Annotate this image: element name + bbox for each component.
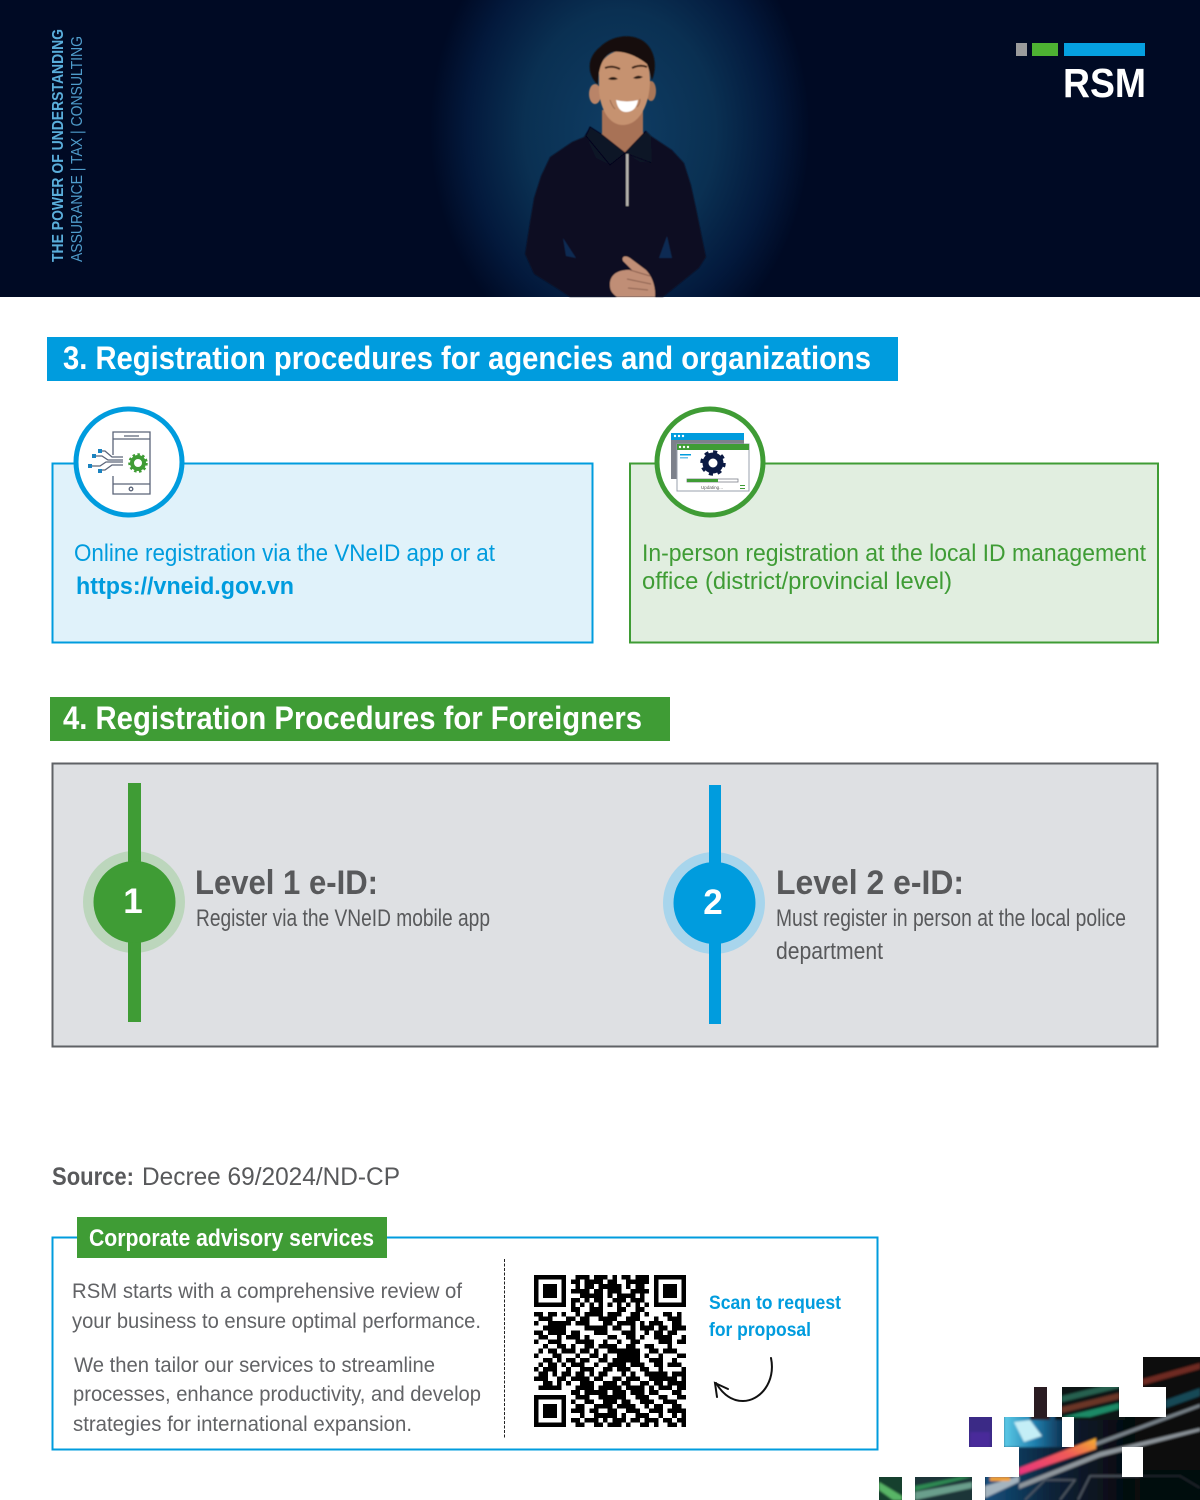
level 2 timeline marker: 2 — [703, 883, 723, 922]
heading: section 4: 4. Registration Procedures for Foreigners — [63, 700, 642, 736]
QR code — [534, 1275, 686, 1427]
level 1 text — [195, 864, 490, 932]
panel label — [77, 1217, 387, 1258]
description text: strategies for international expansion. — [73, 1413, 412, 1436]
mosaic white cut-outs — [1062, 1417, 1143, 1477]
text: in-person registration: In-person registration at the local ID management — [642, 540, 1146, 567]
description text: We then tailor our services to streamline — [74, 1354, 435, 1377]
level 2 text: Must register in person at the local police — [776, 905, 1126, 932]
icon: browser windows with gear: Updating... — [701, 485, 723, 490]
description text: RSM starts with a comprehensive review of — [72, 1280, 462, 1303]
call to action: for proposal — [709, 1320, 811, 1341]
text: in-person registration — [642, 540, 1146, 595]
call to action — [709, 1293, 842, 1341]
call to action: Scan to request — [709, 1293, 842, 1314]
arrow: curved pointing to QR — [715, 1358, 772, 1401]
header banner — [0, 0, 1200, 297]
photo: smiling man in dark sweater — [525, 36, 706, 297]
RSM logo: RSM — [1063, 60, 1146, 106]
icon: browser windows with gear — [657, 409, 763, 515]
source note: Decree 69/2024/ND-CP — [142, 1163, 400, 1191]
text: online registration: https://vneid.gov.vn — [76, 573, 294, 600]
level 1 text: Level 1 e-ID: — [195, 864, 378, 902]
description text: your business to ensure optimal performance. — [72, 1310, 481, 1333]
source note: Source: — [52, 1163, 134, 1191]
panel: corporate advisory services — [52, 1217, 878, 1450]
level 2 timeline marker — [663, 785, 765, 1024]
level 1 timeline marker: 1 — [123, 882, 143, 921]
tagline: THE POWER OF UNDERSTANDING — [50, 29, 67, 262]
icon: phone with gear — [76, 409, 182, 515]
level 1 timeline marker — [83, 783, 185, 1022]
panel: e-ID levels — [52, 764, 1158, 1046]
decorative technology image mosaic — [879, 1357, 1200, 1500]
heading: section 3: 3. Registration procedures for agencies and organizations — [63, 340, 871, 376]
level 2 text: department — [776, 938, 883, 965]
text: in-person registration: office (district/provincial level) — [642, 568, 952, 595]
tagline: ASSURANCE | TAX | CONSULTING — [69, 36, 86, 262]
panel: in-person registration — [630, 409, 1158, 642]
description text: processes, enhance productivity, and develop — [73, 1383, 481, 1406]
level 2 text — [776, 864, 1126, 965]
panel: online registration — [52, 409, 592, 642]
description text — [72, 1280, 481, 1436]
text: online registration: Online registration via the VNeID app or at — [74, 540, 495, 567]
RSM logo — [1016, 43, 1146, 106]
text: online registration — [74, 540, 495, 600]
level 1 text: Register via the VNeID mobile app — [196, 905, 490, 932]
tagline — [50, 29, 86, 262]
panel label: Corporate advisory services — [89, 1225, 374, 1252]
level 2 text: Level 2 e-ID: — [776, 864, 964, 902]
